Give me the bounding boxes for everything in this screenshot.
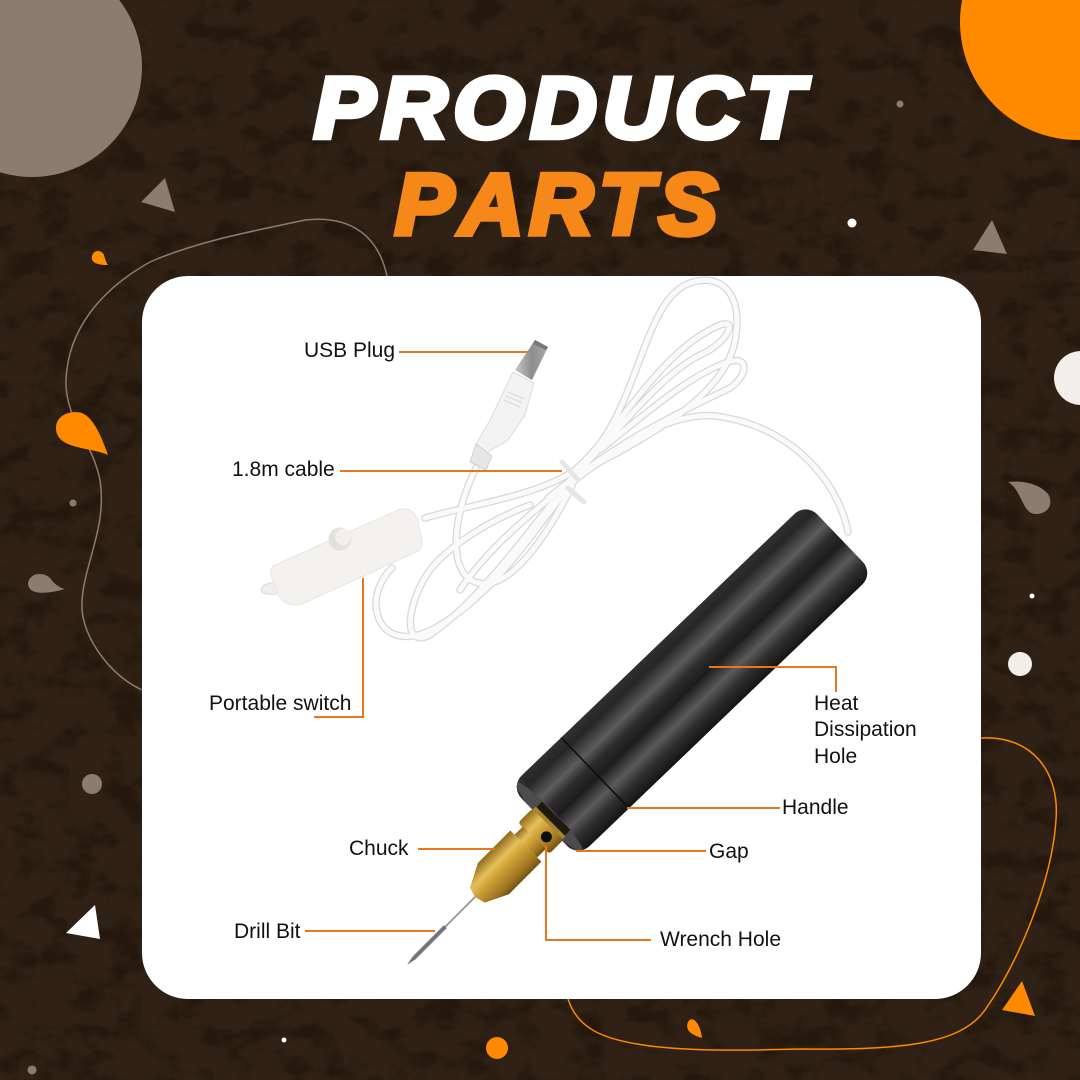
title: PRODUCT	[314, 60, 810, 156]
callout: Portable switch	[209, 578, 363, 717]
title	[314, 60, 810, 253]
decorative triangles	[66, 178, 1035, 1016]
decorative circle: top right	[960, 0, 1080, 140]
decorative curve: grey	[66, 219, 387, 690]
callout: Heat Dissipation Hole: Heat	[814, 692, 859, 715]
callout: Handle: Handle	[782, 796, 849, 819]
callout: Heat Dissipation Hole: Hole	[814, 745, 857, 768]
illustration: drill handle	[510, 503, 874, 857]
callout: Chuck: Chuck	[349, 837, 409, 860]
title: PARTS	[395, 157, 724, 253]
decorative circle: top left	[0, 0, 142, 177]
illustration: white coiled cable	[376, 280, 848, 638]
callout: Heat Dissipation Hole	[709, 667, 917, 768]
callout: Drill Bit: Drill Bit	[234, 920, 301, 943]
panel: white card	[142, 276, 981, 999]
illustration: brass chuck and drill bit	[392, 800, 572, 980]
callout: Portable switch: Portable switch	[209, 692, 351, 715]
callout: Heat Dissipation Hole: Dissipation	[814, 718, 917, 741]
callout: Wrench Hole	[546, 846, 781, 951]
callout: USB Plug: USB Plug	[304, 339, 395, 362]
callout: Gap: Gap	[709, 840, 749, 863]
callout: 1.8m cable: 1.8m cable	[232, 458, 335, 481]
decorative drops	[28, 251, 1050, 1038]
illustration: inline switch	[261, 509, 422, 605]
decorative curve: orange	[568, 738, 1056, 1050]
callout: Wrench Hole: Wrench Hole	[660, 928, 781, 951]
illustration: USB plug	[470, 340, 548, 470]
